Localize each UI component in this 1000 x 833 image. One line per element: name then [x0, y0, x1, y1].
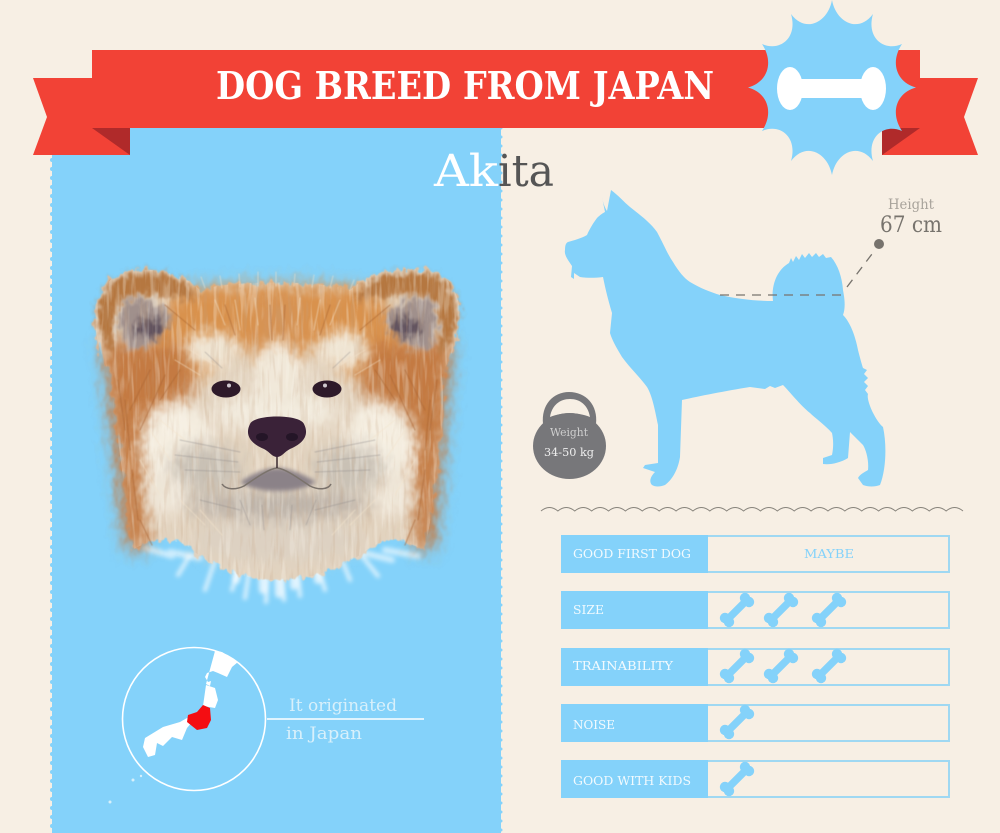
height label: Height: [888, 197, 935, 213]
height value: 67 cm: [880, 213, 942, 238]
centre blaze orange: [255, 300, 300, 355]
row: noise: NOISE: [573, 717, 615, 732]
ribbon main band: [92, 50, 920, 128]
illustration: Akita face: [95, 269, 460, 602]
brown ear rims: [97, 272, 196, 358]
badge: starburst with bone: [748, 0, 916, 175]
left eye: [212, 380, 240, 398]
dog silhouette: [565, 190, 885, 486]
fine pale fur streaks: [95, 269, 460, 580]
title: DOG BREED FROM JAPAN: [216, 63, 714, 108]
starburst: [748, 0, 916, 175]
row: size: SIZE: [573, 602, 604, 617]
orange left side: [102, 340, 195, 550]
height marker dot: [874, 239, 884, 249]
icon: weight kettlebell: [533, 392, 606, 479]
fine dark fur streaks: [95, 269, 460, 580]
weight value: 34-50 kg: [544, 446, 594, 459]
map: Japan in circle: [108, 648, 266, 804]
map outline circle: [122, 648, 266, 790]
ribbon left fold: [92, 128, 130, 155]
breed name: dark part: ita: [498, 146, 554, 197]
origin callout: [267, 696, 424, 744]
map highlighted region: [187, 705, 211, 730]
fur strokes: [118, 272, 437, 545]
right eye: [312, 380, 342, 398]
row: good first dog: MAYBE: [804, 546, 854, 561]
weight label: Weight: [550, 426, 589, 439]
muzzle and mouth: [222, 452, 331, 491]
fur base and colour patches: [95, 269, 460, 580]
banner ribbon: [33, 50, 978, 155]
row: trainability: [561, 648, 949, 686]
nose: [248, 416, 306, 457]
map islands: [108, 651, 238, 804]
row: good with kids: [561, 760, 949, 798]
breed name: [433, 146, 554, 197]
height measure lines: [720, 250, 875, 295]
origin text line 1: It originated: [289, 696, 397, 716]
icon: white bone: [777, 67, 886, 110]
row: trainability: TRAINABILITY: [573, 658, 674, 673]
orange right side: [360, 340, 452, 550]
row: good first dog: [561, 535, 949, 573]
ribbon left tail: [33, 78, 130, 155]
fur wisps below chin: [145, 548, 418, 602]
ribbon right fold: [882, 128, 920, 155]
row: good first dog: GOOD FIRST DOG: [573, 546, 691, 561]
pale brow patches: [186, 332, 238, 368]
row: noise: [561, 704, 949, 742]
panel: blue breed portrait column: [52, 128, 501, 833]
chin fur: [192, 518, 362, 562]
breed name: white part: Ak: [433, 146, 498, 197]
orange crown: [125, 285, 430, 395]
pale cheeks: [142, 403, 214, 487]
ribbon right tail: [882, 78, 978, 155]
row: size: [561, 591, 949, 629]
grey muzzle shading: [169, 444, 241, 492]
row: good with kids: GOOD WITH KIDS: [573, 773, 691, 788]
grey inner ears: [119, 298, 437, 350]
trait rows: [561, 535, 949, 798]
origin text line 2: in Japan: [286, 724, 362, 744]
